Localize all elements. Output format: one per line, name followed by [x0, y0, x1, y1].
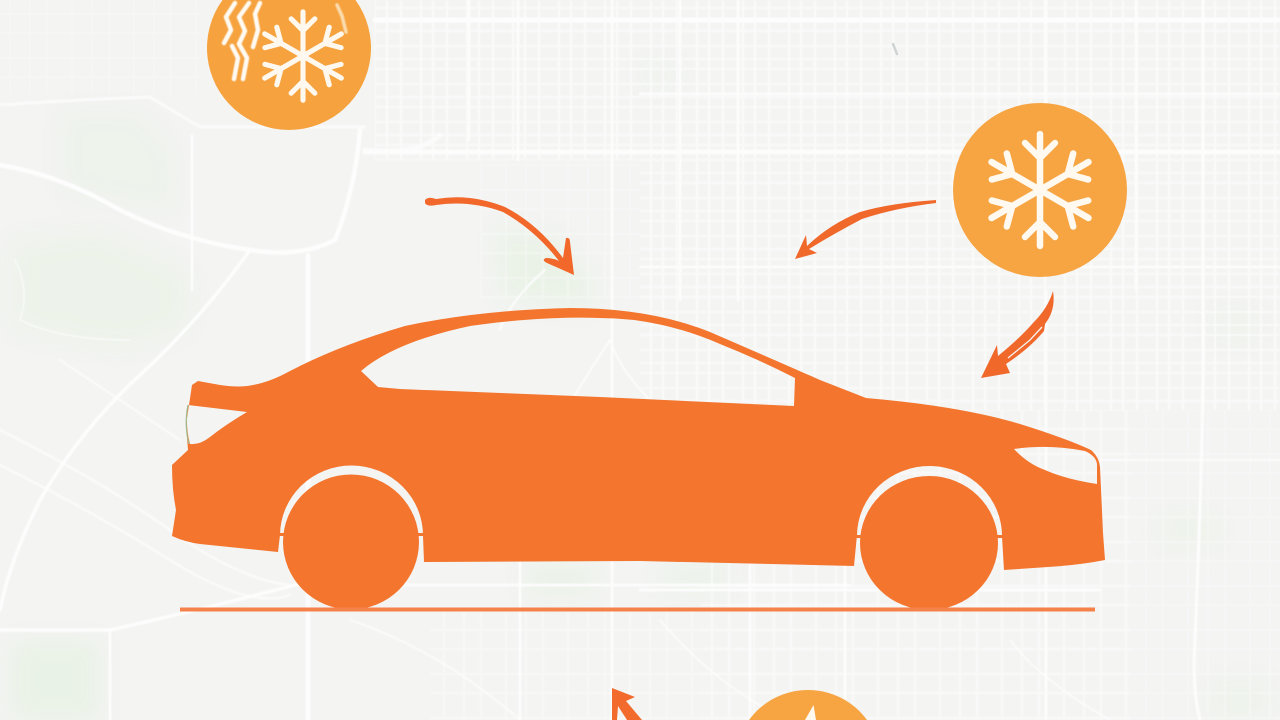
arrow: right circle to the windshield [795, 200, 936, 259]
arrow: top-left pointing to the roof [425, 197, 574, 275]
tail light edge [186, 405, 189, 444]
icon: top-left circle, cold and wind [207, 0, 371, 130]
ground line [180, 608, 1095, 612]
icon: right circle, snowflake [953, 103, 1127, 277]
front wheel [860, 476, 998, 610]
car body with window, tail light and headlight cut-outs [172, 308, 1105, 570]
icon: wavy heat lines [224, 3, 260, 79]
arrow: bottom, pointing upward [612, 688, 642, 720]
car silhouette [172, 308, 1105, 612]
rear wheel [283, 474, 419, 610]
wheel arch ticks [278, 533, 1003, 538]
icon: bottom circle, partly cropped [749, 690, 867, 720]
icon: snowflake small [259, 12, 347, 100]
arrow: right circle to the hood [981, 291, 1054, 378]
